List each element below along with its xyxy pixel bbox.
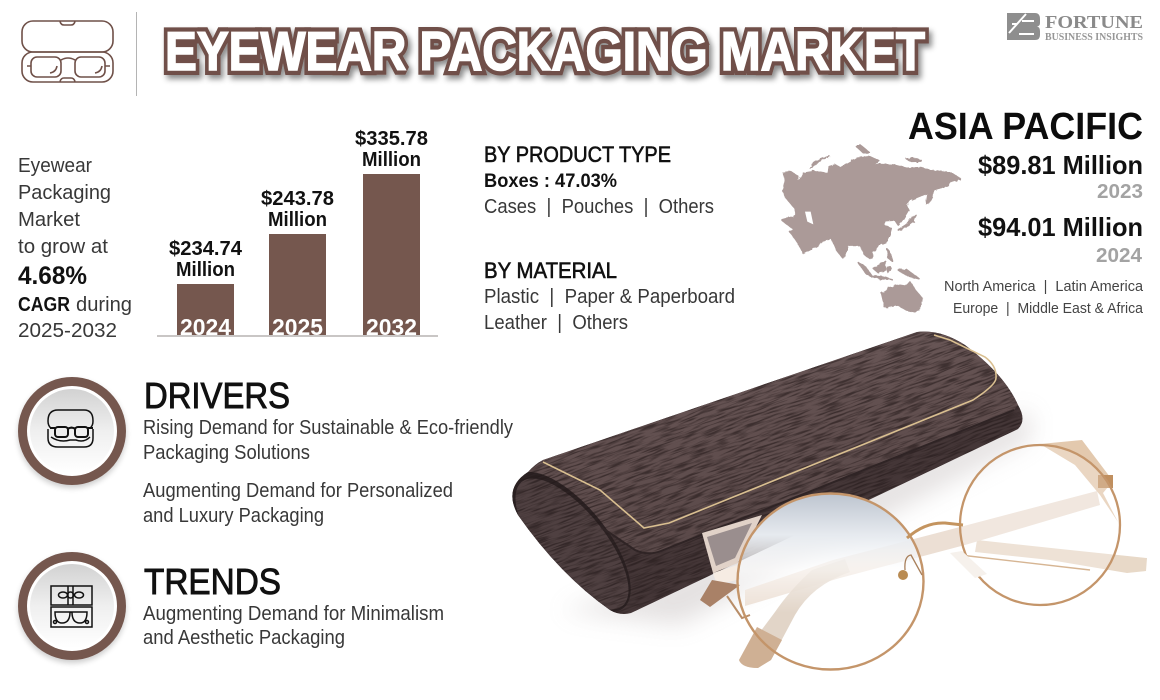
case end cap [512, 472, 631, 612]
bar 2032 [355, 128, 428, 340]
panel: CAGR text: CAGR [18, 294, 70, 316]
title: EYEWEAR PACKAGING MARKET [165, 20, 925, 82]
bridge [907, 523, 963, 538]
panel: CAGR text: Market [18, 208, 80, 231]
leather texture [512, 332, 1022, 614]
case shadow [560, 410, 1030, 625]
heading: TRENDS [144, 561, 281, 602]
panel: Asia Pacific stats [908, 106, 1144, 317]
panel: CAGR text [18, 154, 132, 342]
temple tip [739, 627, 782, 668]
heading: DRIVERS [144, 375, 290, 416]
logo: Fortune Business Insights [1007, 12, 1143, 43]
panel: CAGR text: 2025-2032 [18, 319, 117, 342]
logo mark [1007, 13, 1040, 40]
trend 1: and Aesthetic Packaging [143, 626, 345, 649]
bar 2025: Million [268, 209, 327, 231]
panel: by product type: BY PRODUCT TYPE [484, 142, 671, 167]
flap edge [601, 410, 1014, 553]
bar 2024: Million [176, 259, 235, 281]
value 2024: $94.01 Million [978, 212, 1143, 242]
map: Asia Pacific [782, 145, 960, 312]
panel: CAGR text: Packaging [18, 181, 111, 204]
case [512, 332, 1022, 614]
panel: trends [18, 552, 444, 663]
panel: CAGR text: Eyewear [18, 154, 92, 177]
year 2024: 2024 [1096, 245, 1143, 267]
icon: drivers badge [18, 377, 126, 488]
driver 2: Augmenting Demand for Personalized [143, 479, 453, 502]
icon: trends badge [18, 552, 126, 663]
photo: leather case and glasses [512, 332, 1147, 671]
panel: CAGR text: 4.68% [18, 262, 87, 290]
bar 2032: 2032 [366, 314, 417, 340]
panel: by material: Leather | Others [484, 311, 628, 334]
driver 2: and Luxury Packaging [143, 504, 324, 527]
panel: Asia Pacific stats: Europe | Middle East & Africa [953, 300, 1144, 317]
bar 2024 [169, 238, 243, 340]
trend 1: Augmenting Demand for Minimalism [143, 602, 444, 625]
panel: drivers [18, 375, 514, 527]
stitching [543, 335, 996, 528]
panel: by product type: Boxes : 47.03% [484, 171, 617, 192]
left wing [702, 515, 762, 573]
title: EYEWEAR PACKAGING MARKET [165, 20, 925, 82]
bar 2024: $234.74 [169, 238, 243, 260]
panel: by product type: Cases | Pouches | Others [484, 195, 714, 218]
glasses far temple [975, 540, 1147, 573]
trend 1 [143, 602, 444, 649]
logo wordmark: FORTUNE [1045, 12, 1143, 32]
bar 2032: Million [362, 149, 421, 171]
year 2023: 2023 [1097, 181, 1143, 203]
logo tagline: BUSINESS INSIGHTS [1045, 32, 1143, 43]
front temple arm [739, 559, 850, 668]
front lens rim [738, 494, 924, 670]
axis line [157, 335, 438, 337]
bar chart [157, 128, 438, 340]
panel: CAGR text: to grow at [18, 235, 108, 258]
bar 2024: 2024 [180, 314, 231, 340]
divider [136, 12, 137, 96]
panel: by material: Plastic | Paper & Paperboard [484, 285, 735, 308]
bar 2025: $243.78 [261, 188, 334, 210]
driver 1 [143, 416, 514, 464]
region heading: ASIA PACIFIC [908, 106, 1143, 148]
flap [528, 332, 1018, 553]
bar 2025: 2025 [272, 314, 323, 340]
left lens tint [739, 494, 918, 602]
right wing [1040, 440, 1118, 522]
driver 1: Packaging Solutions [143, 441, 310, 464]
bar 2032: $335.78 [355, 128, 428, 150]
driver 1: Rising Demand for Sustainable & Eco-friendly [143, 416, 514, 439]
icon: open glasses case [22, 21, 113, 82]
bar 2025 [261, 188, 334, 340]
other regions: North America | Latin America [944, 278, 1144, 295]
right lens [960, 445, 1120, 605]
value 2023: $89.81 Million [978, 150, 1143, 180]
panel: CAGR text: during [76, 293, 132, 316]
panel: by material [484, 258, 735, 334]
driver 2 [143, 479, 453, 527]
panel: by material: BY MATERIAL [484, 258, 617, 283]
nose pads [950, 551, 987, 578]
panel: by product type [484, 142, 714, 218]
